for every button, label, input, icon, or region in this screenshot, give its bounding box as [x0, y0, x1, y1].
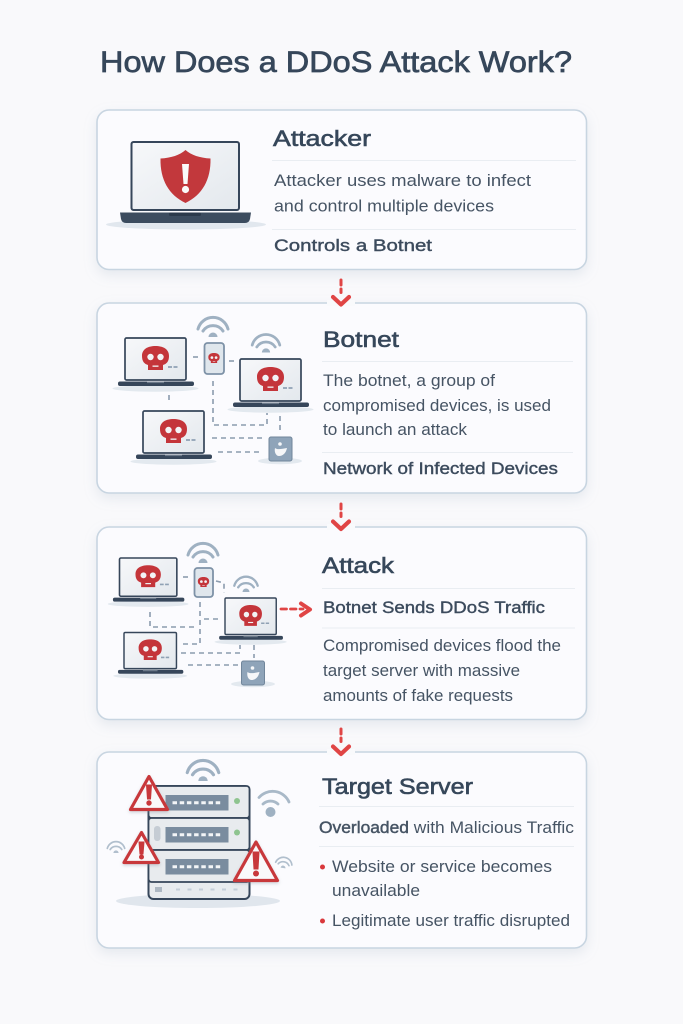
icon: warning triangle 1 — [130, 776, 168, 810]
icon: wifi above phone — [198, 317, 228, 337]
icon: wifi right of server — [259, 791, 289, 817]
bullet: website unavailable: unavailable — [332, 881, 420, 900]
arrow: attacker to botnet — [327, 280, 355, 306]
icon: infected phone — [204, 343, 224, 374]
subheading: botnet sends DDoS traffic: Botnet Sends DDoS Traffic — [323, 598, 546, 617]
icon: infected laptop 3 — [113, 632, 187, 679]
heading: target server: Target Server — [322, 774, 474, 799]
subheading: controls a botnet: Controls a Botnet — [274, 236, 432, 255]
text: botnet description: to launch an attack — [323, 420, 467, 439]
network connections — [150, 577, 254, 665]
heading: botnet: Botnet — [323, 327, 400, 352]
icon: overloaded server stack — [116, 786, 280, 908]
icon: warning triangle 2 — [124, 832, 158, 862]
heading: attack: Attack — [322, 553, 395, 578]
icon: infected laptop 1 — [108, 558, 189, 607]
title: How Does a DDoS Attack Work? — [100, 46, 572, 79]
icon: infected laptop 3 — [130, 411, 216, 465]
icon: infected smart device — [258, 437, 302, 464]
icon: infected laptop 1 — [112, 338, 198, 392]
text: botnet description: compromised devices, is used — [323, 396, 551, 415]
panel: botnet — [97, 303, 586, 493]
network connections — [169, 357, 280, 452]
icon: wifi above laptop — [252, 334, 280, 352]
icon: wifi right of warning — [275, 856, 293, 869]
text: attacker description: and control multiple devices — [274, 196, 494, 216]
icon: warning triangle 3 — [234, 842, 278, 880]
icon: infected laptop 2 — [228, 359, 314, 413]
icon: infected smart device — [231, 661, 275, 687]
subheading: overloaded with malicious traffic: Overloaded with Malicious Traffic — [319, 818, 575, 837]
text: attacker description: Attacker uses malware to infect — [274, 171, 531, 190]
text: botnet description: The botnet, a group of — [323, 371, 495, 390]
text: attack description: target server with massive — [323, 661, 520, 680]
icon: infected laptop 2 — [214, 598, 287, 645]
arrow: DDoS traffic — [281, 604, 310, 616]
arrow: botnet to attack — [327, 504, 355, 530]
text: attacker description — [274, 171, 531, 216]
bullet: website unavailable — [320, 857, 552, 900]
text: attack description: amounts of fake requests — [323, 686, 513, 705]
icon: laptop with warning shield — [106, 142, 266, 230]
icon: wifi above laptop — [234, 577, 258, 592]
bullet: website unavailable: Website or service becomes — [332, 857, 552, 876]
bullet: traffic disrupted: Legitimate user traffic disrupted — [332, 911, 570, 930]
icon: wifi above phone — [188, 543, 218, 563]
panel: attacker — [97, 110, 586, 270]
panel: attack — [97, 527, 586, 720]
panel: target server — [97, 752, 586, 948]
text: botnet description — [323, 371, 551, 439]
subheading: network of infected devices: Network of Infected Devices — [323, 459, 558, 478]
icon: wifi left of server — [107, 842, 125, 853]
icon: wifi above server — [187, 760, 219, 781]
icon: infected phone — [194, 568, 213, 597]
arrow: attack to target server — [327, 729, 355, 755]
text: attack description — [323, 636, 561, 705]
heading: attacker: Attacker — [273, 126, 372, 151]
text: attack description: Compromised devices flood the — [323, 636, 561, 655]
